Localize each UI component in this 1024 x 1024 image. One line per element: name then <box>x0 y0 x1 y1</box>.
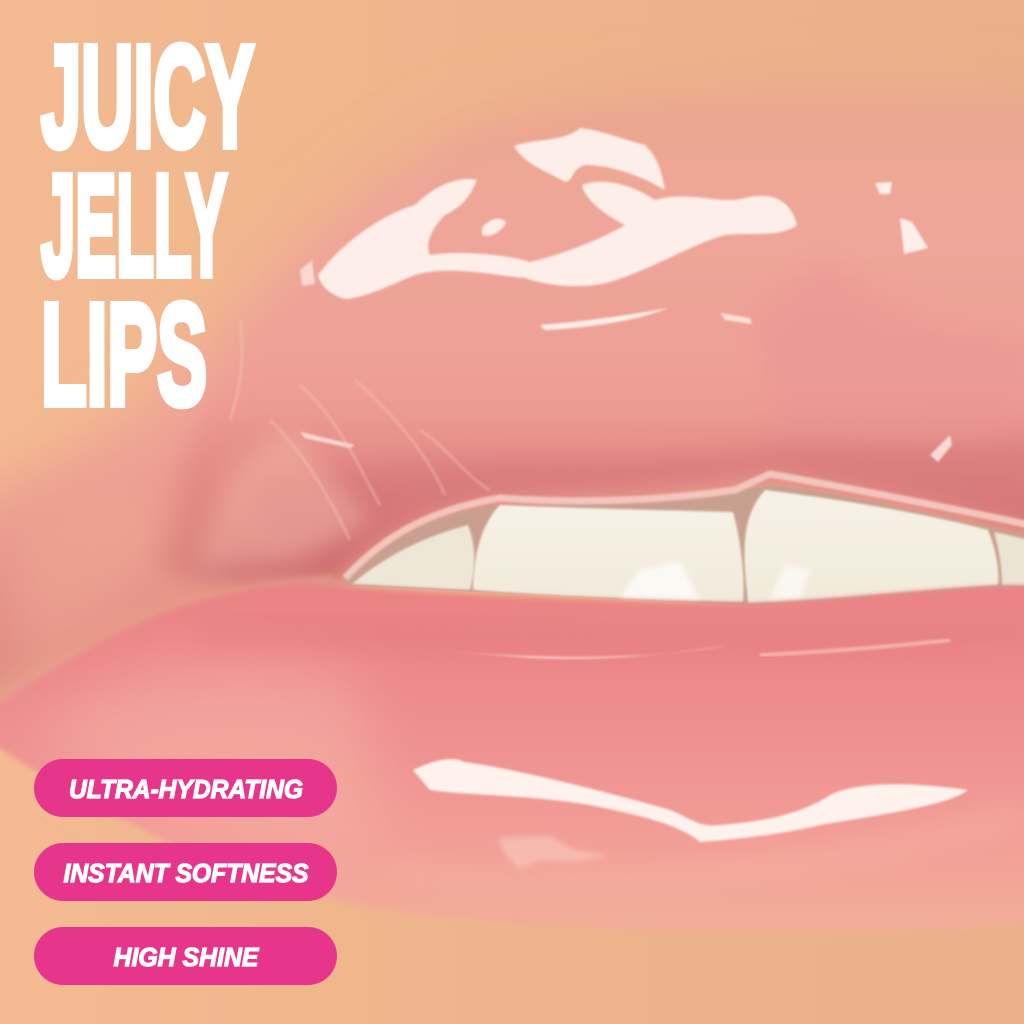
tooth centre <box>473 505 744 602</box>
tooth far right <box>994 532 1024 586</box>
upper lip <box>0 92 1024 710</box>
pill: instant softness <box>34 843 337 901</box>
pill: ultra-hydrating: ULTRA-HYDRATING <box>69 774 303 804</box>
lower lip <box>0 583 1024 933</box>
tooth left <box>352 525 474 590</box>
pill: ultra-hydrating <box>34 759 337 817</box>
title line 1: JUICY <box>41 16 254 177</box>
lower lip highlight <box>413 759 968 842</box>
title line 3: LIPS <box>41 274 207 435</box>
upper lip gum line <box>345 474 1024 578</box>
upper lip shading <box>0 262 1024 700</box>
tooth right <box>744 490 999 603</box>
pill: high shine <box>34 927 337 985</box>
pill: high shine: HIGH SHINE <box>114 942 259 972</box>
upper lip creases <box>230 320 490 540</box>
upper lip gloss highlight <box>300 128 952 462</box>
lower lip small reflections <box>380 800 1024 894</box>
title <box>41 16 254 435</box>
mouth interior and teeth <box>340 485 1024 606</box>
pill: instant softness: INSTANT SOFTNESS <box>64 858 309 888</box>
text: JELLY <box>41 145 227 306</box>
